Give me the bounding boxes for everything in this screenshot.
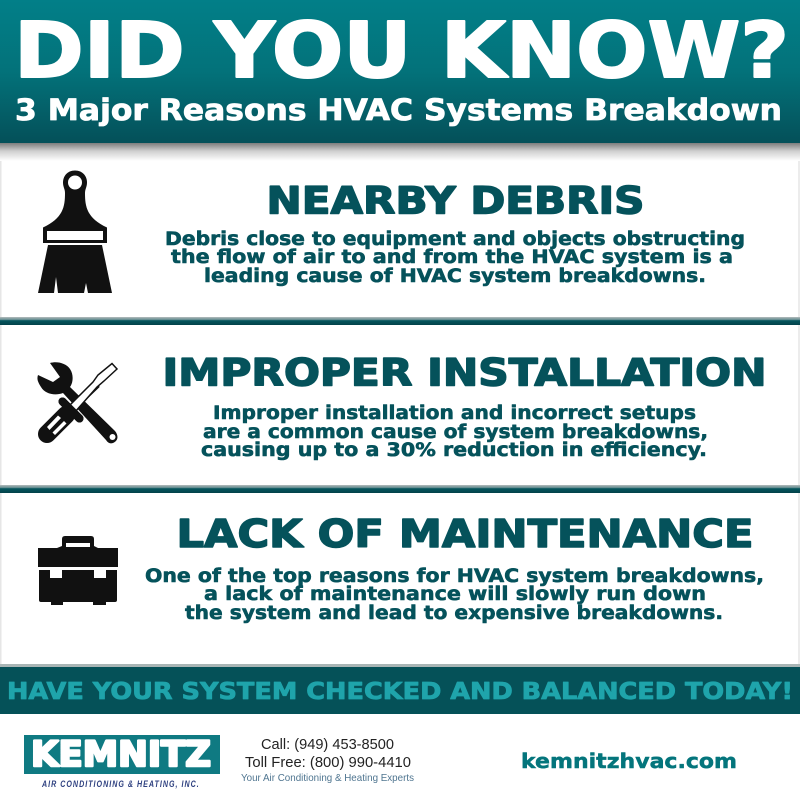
header banner bbox=[0, 0, 800, 161]
body text: a lack of maintenance will slowly run down bbox=[204, 584, 706, 605]
body text: Improper installation and incorrect setups bbox=[213, 403, 696, 424]
contact details bbox=[241, 737, 414, 784]
body text: leading cause of HVAC system breakdowns. bbox=[204, 266, 706, 287]
panel: improper installation bbox=[37, 352, 766, 461]
body text: One of the top reasons for HVAC system breakdowns, bbox=[145, 566, 764, 587]
body text: Debris close to equipment and objects obstructing bbox=[165, 229, 745, 250]
contact details: Toll Free: (800) 990-4410 bbox=[245, 755, 411, 771]
panel: nearby debris bbox=[38, 170, 745, 293]
icon: paint brush bbox=[38, 170, 112, 293]
logo wordmark: KEMNITZ bbox=[31, 735, 211, 775]
call to action text: HAVE YOUR SYSTEM CHECKED AND BALANCED TODAY! bbox=[7, 679, 793, 705]
website: kemnitzhvac.com bbox=[521, 749, 737, 773]
logo tagline: AIR CONDITIONING & HEATING, INC. bbox=[41, 778, 199, 789]
title: DID YOU KNOW? bbox=[14, 7, 789, 96]
icon: toolbox bbox=[38, 536, 118, 605]
contact details: Your Air Conditioning & Heating Experts bbox=[241, 772, 414, 784]
body text: causing up to a 30% reduction in efficiency. bbox=[201, 440, 707, 461]
call to action banner bbox=[0, 664, 800, 714]
contact details: Call: (949) 453-8500 bbox=[261, 737, 394, 753]
body text: are a common cause of system breakdowns, bbox=[203, 422, 708, 443]
body text: the flow of air to and from the HVAC system is a bbox=[171, 247, 733, 268]
heading: IMPROPER INSTALLATION bbox=[162, 352, 766, 394]
logo: Kemnitz bbox=[24, 735, 220, 789]
subtitle: 3 Major Reasons HVAC Systems Breakdown bbox=[15, 93, 782, 127]
icon: wrench and screwdriver bbox=[37, 362, 117, 443]
divider bbox=[0, 485, 800, 493]
body text bbox=[165, 229, 745, 287]
body text bbox=[145, 566, 764, 624]
heading: LACK OF MAINTENANCE bbox=[176, 512, 754, 556]
panel: lack of maintenance bbox=[38, 512, 764, 624]
body text: the system and lead to expensive breakdowns. bbox=[185, 603, 723, 624]
body text bbox=[201, 403, 708, 461]
divider bbox=[0, 317, 800, 325]
heading: NEARBY DEBRIS bbox=[266, 180, 644, 222]
